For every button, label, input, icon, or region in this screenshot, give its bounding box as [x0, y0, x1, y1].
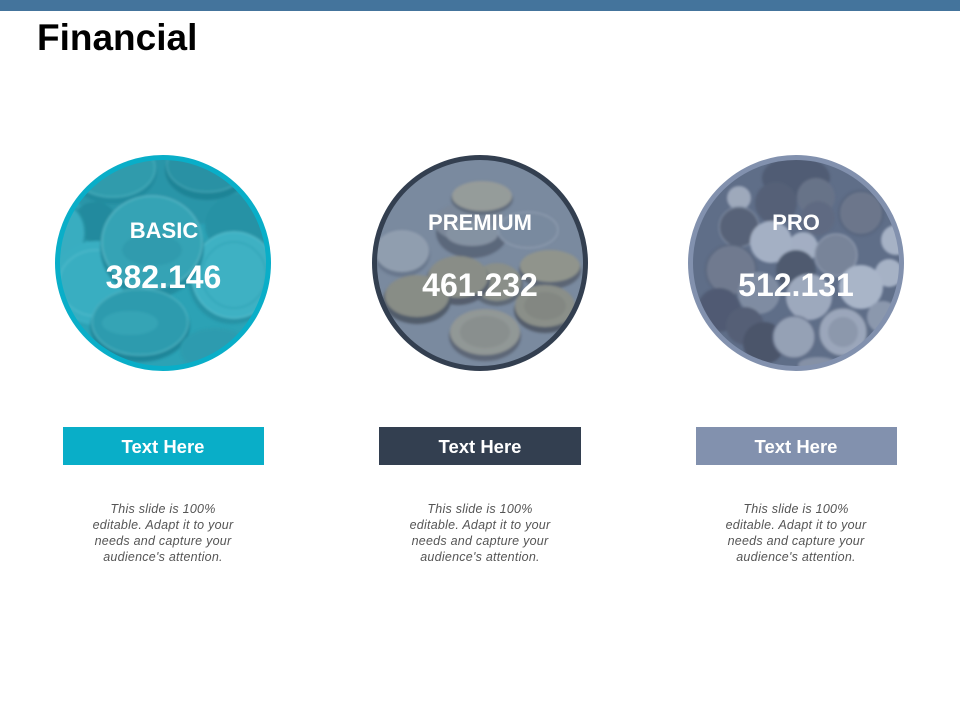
description: editable. Adapt it to your: [726, 518, 867, 532]
description: needs and capture your: [728, 534, 865, 548]
description: editable. Adapt it to your: [93, 518, 234, 532]
description: needs and capture your: [95, 534, 232, 548]
banner: [63, 427, 264, 465]
value: 512.131: 512.131: [738, 267, 854, 303]
description: This slide is 100%: [110, 502, 216, 516]
title: Financial: [37, 17, 197, 58]
label: BASIC: BASIC: [130, 218, 198, 243]
panel: premium: [372, 155, 588, 564]
banner background: [379, 427, 581, 465]
description: audience's attention.: [103, 550, 223, 564]
description: audience's attention.: [420, 550, 540, 564]
value: 382.146: 382.146: [106, 259, 221, 295]
top bar: [0, 0, 960, 11]
photo: scattered coins: [693, 160, 899, 366]
banner background: [63, 427, 264, 465]
banner background: [696, 427, 897, 465]
photo: stacked coins: [372, 155, 588, 371]
description: [410, 502, 551, 564]
photo: teal coins: [60, 160, 266, 366]
panel: basic: [55, 155, 271, 561]
banner text: Text Here: [755, 436, 837, 457]
label: PRO: PRO: [772, 210, 820, 235]
banner: [379, 427, 581, 465]
description: editable. Adapt it to your: [410, 518, 551, 532]
label: PREMIUM: PREMIUM: [428, 210, 532, 235]
ring: [374, 158, 586, 368]
panel: pro: [688, 155, 911, 564]
ring: [690, 158, 902, 368]
description: This slide is 100%: [743, 502, 849, 516]
description: audience's attention.: [736, 550, 856, 564]
description: needs and capture your: [412, 534, 549, 548]
banner: [696, 427, 897, 465]
description: [93, 502, 234, 564]
description: [726, 502, 867, 564]
ring: [58, 158, 268, 368]
description: This slide is 100%: [427, 502, 533, 516]
value: 461.232: 461.232: [422, 267, 538, 303]
banner text: Text Here: [122, 436, 204, 457]
banner text: Text Here: [439, 436, 521, 457]
